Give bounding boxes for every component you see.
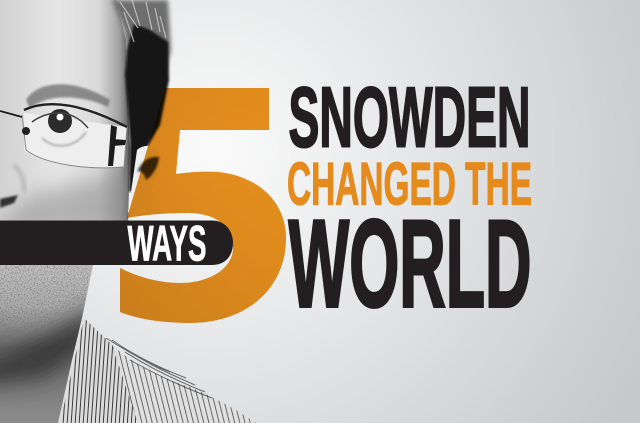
- ear: [128, 146, 160, 212]
- nose shading: [14, 165, 24, 192]
- headline: [287, 70, 532, 334]
- glasses temple arm: [0, 111, 22, 117]
- glasses rim: [22, 115, 127, 168]
- nostril: [0, 195, 18, 208]
- upper face: [0, 0, 130, 225]
- eye white area: [24, 113, 127, 168]
- stubble: [0, 262, 93, 350]
- hair strands: [120, 0, 166, 42]
- upper eyelid: [32, 113, 88, 128]
- lower eyelid: [42, 132, 86, 146]
- iris: [48, 109, 72, 133]
- glasses hinge: [22, 127, 30, 135]
- eye socket crease: [24, 104, 127, 127]
- catchlight: [56, 114, 64, 120]
- cheek shading: [0, 169, 129, 220]
- shirt: [60, 318, 256, 423]
- glasses arm seen through lens: [108, 125, 126, 166]
- hair: [112, 0, 171, 192]
- eyebrow: [26, 84, 110, 108]
- dark hair mass: [125, 24, 169, 192]
- streaked hair crown: [112, 0, 171, 70]
- big numeral 5: [120, 88, 286, 323]
- chin shadow: [0, 300, 100, 388]
- portrait photo: [0, 0, 256, 423]
- banner label: WAYS: WAYS: [128, 216, 206, 272]
- black banner: [0, 220, 233, 265]
- lower face and neck: [0, 255, 95, 423]
